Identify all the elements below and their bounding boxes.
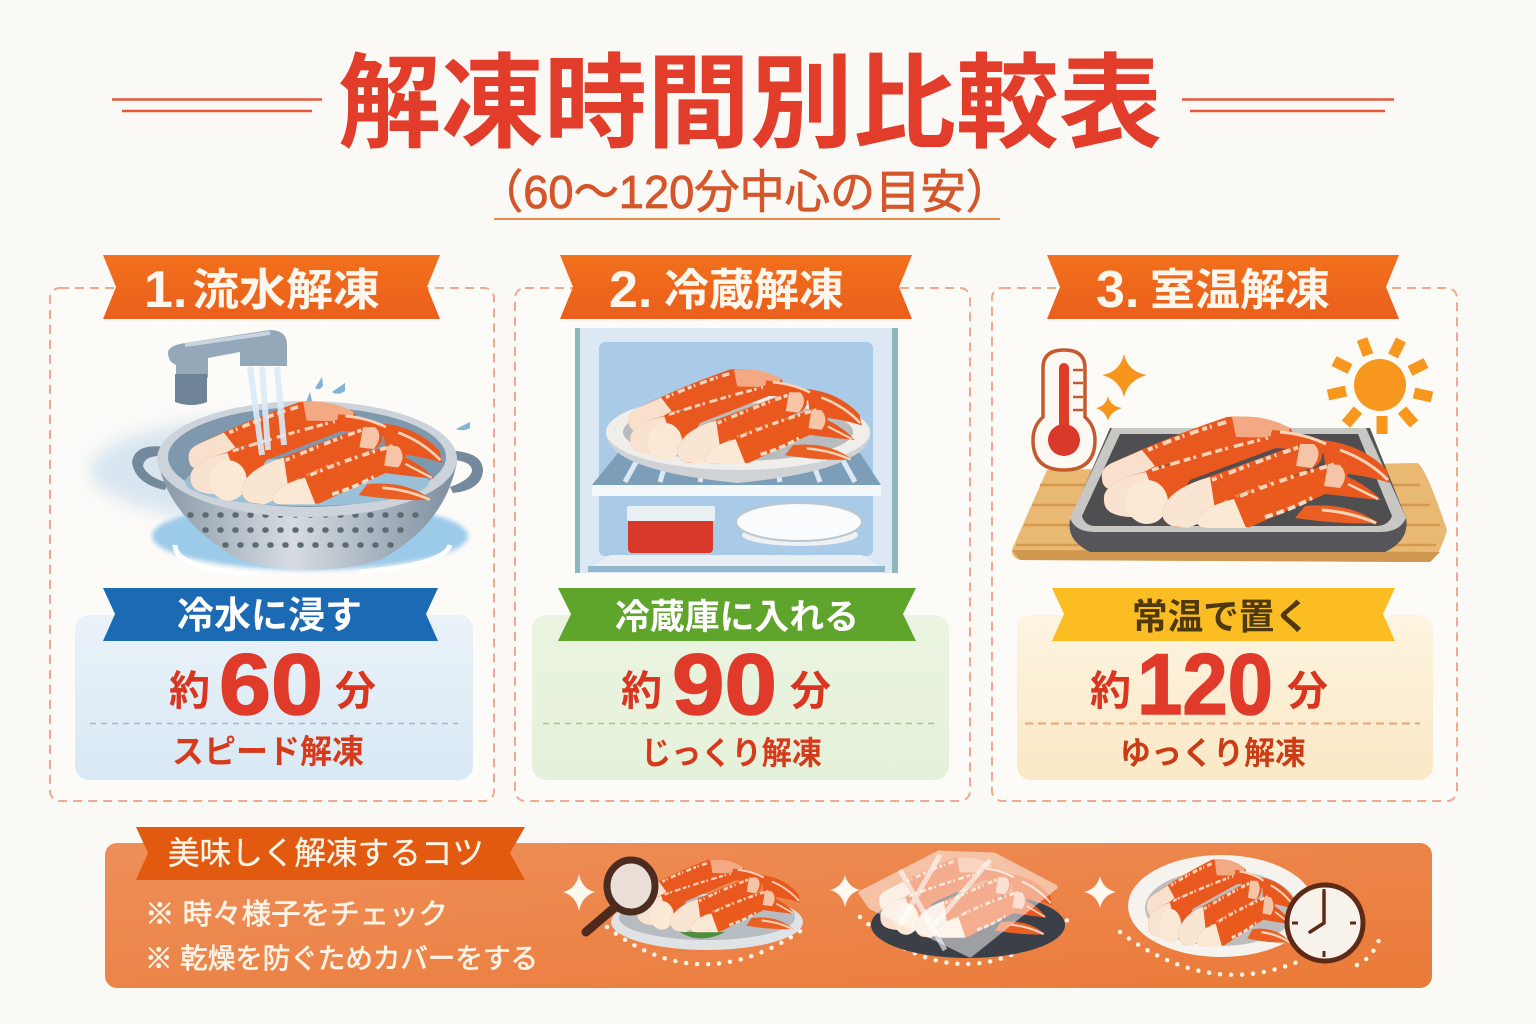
subtitle: （60～120分中心の目安） — [478, 166, 1011, 218]
time: about 90 minutes — [621, 637, 831, 733]
heading: 2 fridge: 2. — [609, 261, 652, 319]
illustration: crab on tray — [1012, 416, 1447, 562]
heading: 1 running water: 流水解凍 — [192, 266, 380, 315]
tips heading ribbon — [136, 827, 525, 880]
sub ribbon: put in fridge — [532, 588, 949, 780]
time: about 60 minutes: 分 — [335, 668, 376, 714]
time: about 60 minutes: 60 — [219, 637, 323, 733]
heading: 2 fridge: 冷蔵解凍 — [664, 266, 844, 315]
heading: 3 room temperature — [1047, 255, 1399, 319]
time: about 60 minutes: 約 — [169, 668, 210, 714]
illustration: covered plate — [860, 853, 1073, 964]
time: about 120 minutes — [1090, 637, 1328, 733]
caption: speedy thaw: スピード解凍 — [172, 733, 364, 770]
icon: sparkle 1 — [563, 874, 595, 911]
caption: slow thaw: じっくり解凍 — [641, 735, 822, 771]
heading: 1 running water — [103, 255, 440, 319]
heading: 2 fridge — [560, 255, 912, 319]
sub ribbon: put in fridge: 冷蔵庫に入れる — [615, 598, 859, 637]
title: 解凍時間別比較表 — [338, 46, 1162, 161]
icon: sparkles — [1096, 354, 1147, 421]
illustration: colander under tap — [90, 330, 483, 575]
sub ribbon: leave at room temperature: 常温で置く — [1132, 596, 1310, 637]
heading: 3 room temperature: 室温解凍 — [1150, 266, 1330, 315]
tip text: cover: ※ 乾燥を防ぐためカバーをする — [145, 943, 538, 974]
panel: tips — [105, 827, 1432, 988]
time: about 90 minutes: 約 — [621, 668, 662, 714]
time: about 60 minutes — [169, 637, 376, 733]
time: about 90 minutes: 分 — [790, 668, 831, 714]
time: about 120 minutes: 約 — [1090, 668, 1131, 714]
icon: sun — [1328, 339, 1432, 434]
illustration: crab in fridge — [575, 328, 898, 573]
sub ribbon: cold water — [75, 588, 473, 780]
panel: room temperature thaw — [992, 255, 1457, 801]
time: about 120 minutes: 分 — [1287, 668, 1328, 714]
illustration: checking plate with magnifier — [586, 860, 803, 964]
sub ribbon: leave at room temperature — [1017, 588, 1433, 780]
sub ribbon: cold water: 冷水に浸す — [177, 595, 362, 636]
title — [112, 46, 1394, 161]
icon: thermometer — [1033, 350, 1095, 470]
panel: fridge thaw — [515, 255, 970, 801]
tips heading ribbon: 美味しく解凍するコツ — [168, 835, 484, 871]
icon: sparkle 2 — [830, 875, 860, 907]
icon: sparkle 3 — [1084, 876, 1116, 908]
time: about 90 minutes: 90 — [672, 637, 777, 733]
tip text: check: ※ 時々様子をチェック — [145, 898, 448, 931]
illustration: plate with clock — [1120, 855, 1379, 975]
caption: leisurely thaw: ゆっくり解凍 — [1120, 735, 1306, 771]
heading: 3 room temperature: 3. — [1096, 261, 1139, 319]
panel: running water thaw — [50, 255, 494, 801]
time: about 120 minutes: 120 — [1137, 637, 1273, 733]
heading: 1 running water: 1. — [144, 261, 187, 319]
